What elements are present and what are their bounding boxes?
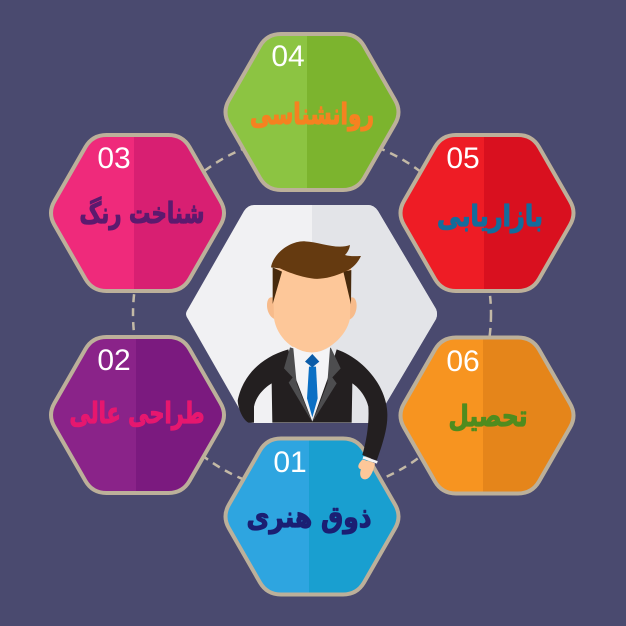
number 03: 03 <box>97 142 131 175</box>
panel: 05 marketing <box>400 135 574 291</box>
number 04: 04 <box>271 40 305 73</box>
panel: 06 education <box>400 338 574 494</box>
panel: central white hexagon <box>186 205 437 423</box>
panel: 03 color knowledge <box>51 135 224 291</box>
label: color knowledge: شناخت رنگ <box>80 196 204 230</box>
label: artistic taste: ذوق هنری <box>246 500 372 534</box>
number 01: 01 <box>273 446 307 479</box>
label: marketing: بازاریابی <box>437 199 543 233</box>
panel: 04 psychology <box>226 34 398 190</box>
label: psychology: روانشناسی <box>250 97 374 131</box>
icon: businessman <box>238 241 387 479</box>
number 02: 02 <box>97 344 131 377</box>
label: education: تحصیل <box>448 399 528 433</box>
number 05: 05 <box>446 142 480 175</box>
label: high design: طراحی عالی <box>70 396 204 430</box>
panel: 02 high design <box>51 337 224 493</box>
number 06: 06 <box>446 345 480 378</box>
panel: 01 artistic taste <box>226 438 398 594</box>
